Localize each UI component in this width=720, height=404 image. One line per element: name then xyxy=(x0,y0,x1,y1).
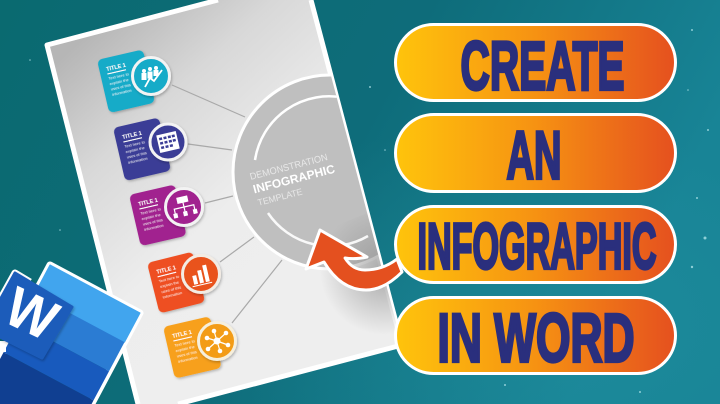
icon: curved arrow xyxy=(306,230,402,290)
icon: bar chart xyxy=(182,256,220,292)
pill: CREATE xyxy=(396,24,676,104)
card 1: cyan: TITLE 1 xyxy=(106,63,127,73)
icon: org chart xyxy=(166,188,202,226)
card 4: red-orange xyxy=(147,252,220,313)
card 5: orange: explain the xyxy=(175,344,196,353)
document page xyxy=(47,0,427,404)
card 3: purple: Text here to xyxy=(140,206,162,216)
card 2: indigo: TITLE 1 xyxy=(122,131,143,141)
card 4: red-orange: TITLE 1 xyxy=(156,265,177,276)
card 4: red-orange: uses of this xyxy=(161,285,182,294)
card 1: cyan: Text here to xyxy=(108,71,130,81)
connector lines xyxy=(172,85,282,323)
card 3: purple: uses of this xyxy=(142,217,163,227)
icon: calendar grid xyxy=(150,124,186,160)
card 1: cyan: uses of this xyxy=(110,82,131,92)
pill: AN xyxy=(396,114,676,193)
card 4: red-orange: information xyxy=(162,290,183,300)
icon: people and growth arrow xyxy=(132,58,170,94)
circle heading: DEMONSTRATION xyxy=(249,152,329,183)
card 2: indigo: uses of this xyxy=(126,150,147,160)
icon: Microsoft Word logo xyxy=(0,265,140,404)
card 5: orange: TITLE 1 xyxy=(172,330,193,340)
card 1: cyan: explain the xyxy=(109,77,130,86)
card 4: red-orange: Text here to xyxy=(158,274,180,284)
central circle xyxy=(232,74,396,328)
card 2: indigo: Text here to xyxy=(124,139,146,149)
card 1: cyan xyxy=(97,49,170,113)
card 2: indigo: explain the xyxy=(125,145,146,154)
card 5: orange: information xyxy=(178,355,198,364)
card 3: purple: information xyxy=(144,223,164,232)
circle heading: INFOGRAPHIC xyxy=(252,162,337,196)
card 2: indigo xyxy=(113,117,186,181)
card 5: orange: uses of this xyxy=(176,349,197,359)
card 3: purple: TITLE 1 xyxy=(138,198,159,208)
card 1: cyan: information xyxy=(112,88,132,97)
card 5: orange: Text here to xyxy=(174,338,196,348)
card 3: purple: explain the xyxy=(141,212,162,221)
circle heading xyxy=(250,154,335,205)
card 3: purple xyxy=(129,184,202,246)
circle heading: TEMPLATE xyxy=(256,187,304,208)
card 5: orange xyxy=(163,316,236,379)
icon: hub network xyxy=(198,322,236,360)
card 2: indigo: information xyxy=(128,156,148,165)
pill: AN: AN xyxy=(506,117,562,193)
card 4: red-orange: explain the xyxy=(159,279,180,289)
